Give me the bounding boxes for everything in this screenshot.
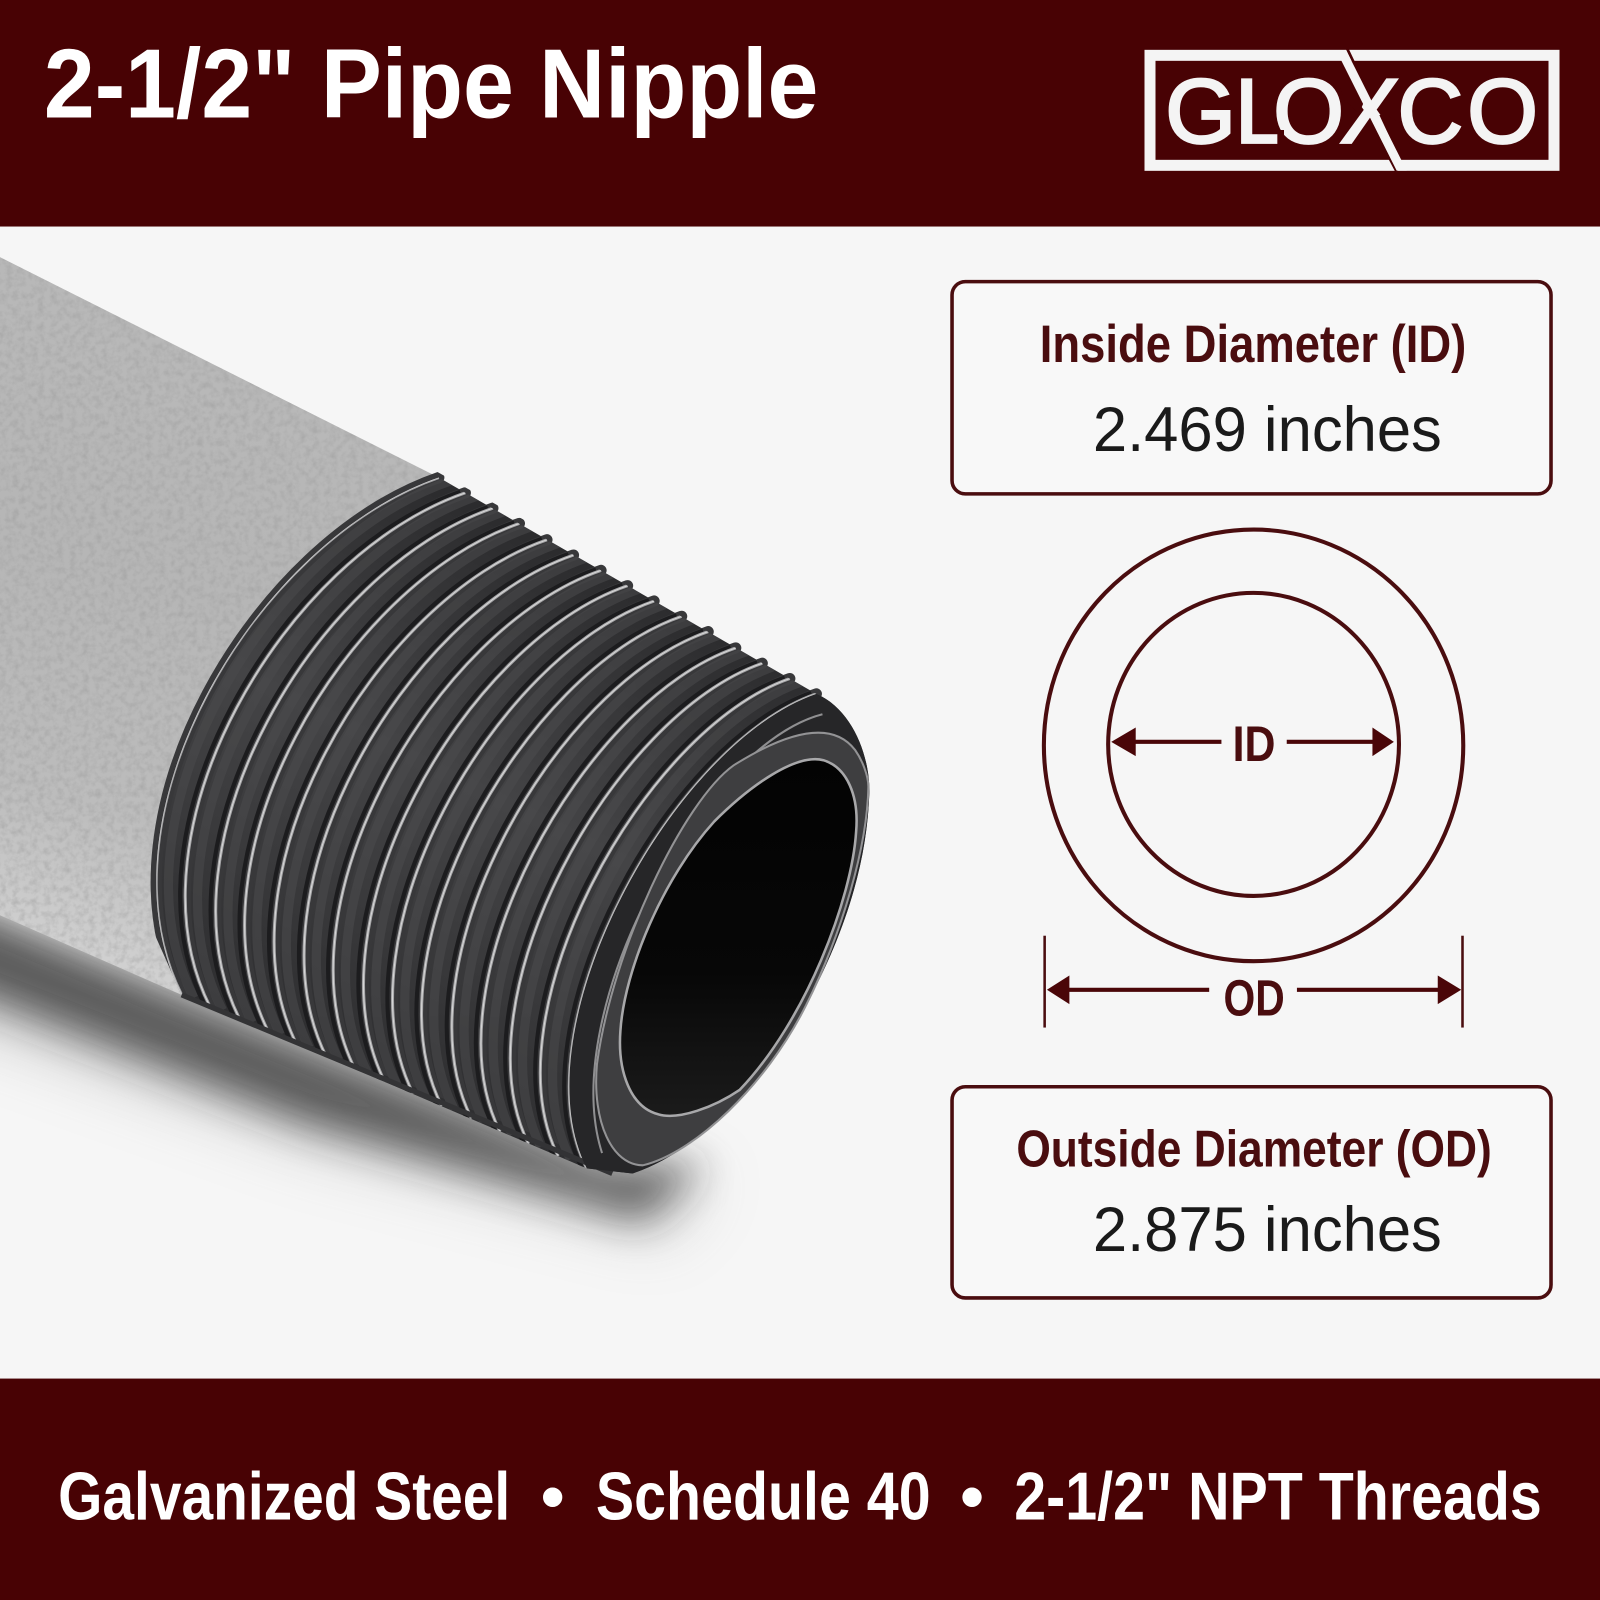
diagram: pipe cross-section (1043, 530, 1464, 1028)
bullet: • (960, 1459, 984, 1534)
heading: inside diameter: Inside Diameter (ID) (1040, 315, 1466, 374)
spec: schedule: Schedule 40 (596, 1459, 931, 1534)
value: outside diameter: 2.875 inches (1093, 1195, 1442, 1265)
arrow: ID left (1111, 728, 1221, 756)
pipe shadow (0, 867, 714, 1240)
threaded section (151, 477, 869, 1173)
heading: outside diameter: Outside Diameter (OD) (1016, 1120, 1492, 1178)
title: 2-1/2" Pipe Nipple (44, 28, 818, 138)
outer circle (1044, 530, 1463, 961)
arrow: OD left (1047, 976, 1209, 1004)
arrow: OD right (1297, 976, 1461, 1004)
bullet: • (541, 1459, 564, 1534)
logo: GLOXCO: GLOXCO (1165, 62, 1538, 163)
OD extension line left (1043, 936, 1046, 1028)
spec: material: Galvanized Steel (58, 1459, 510, 1534)
value: inside diameter: 2.469 inches (1093, 395, 1442, 465)
pipe bore (620, 759, 857, 1116)
galvanized pipe body (0, 257, 439, 995)
background panel (0, 227, 1600, 1380)
footer band (0, 1379, 1600, 1600)
arrow: ID right (1287, 728, 1394, 756)
inner circle (1108, 593, 1399, 896)
OD extension line right (1461, 936, 1464, 1028)
pipe end rim (569, 694, 869, 1173)
pipe nipple photo illustration (0, 257, 869, 1240)
panel: outside diameter (952, 1087, 1551, 1298)
OD label: OD (1223, 969, 1285, 1026)
ID label: ID (1233, 716, 1276, 772)
header band (0, 0, 1600, 227)
panel: inside diameter (952, 282, 1551, 494)
